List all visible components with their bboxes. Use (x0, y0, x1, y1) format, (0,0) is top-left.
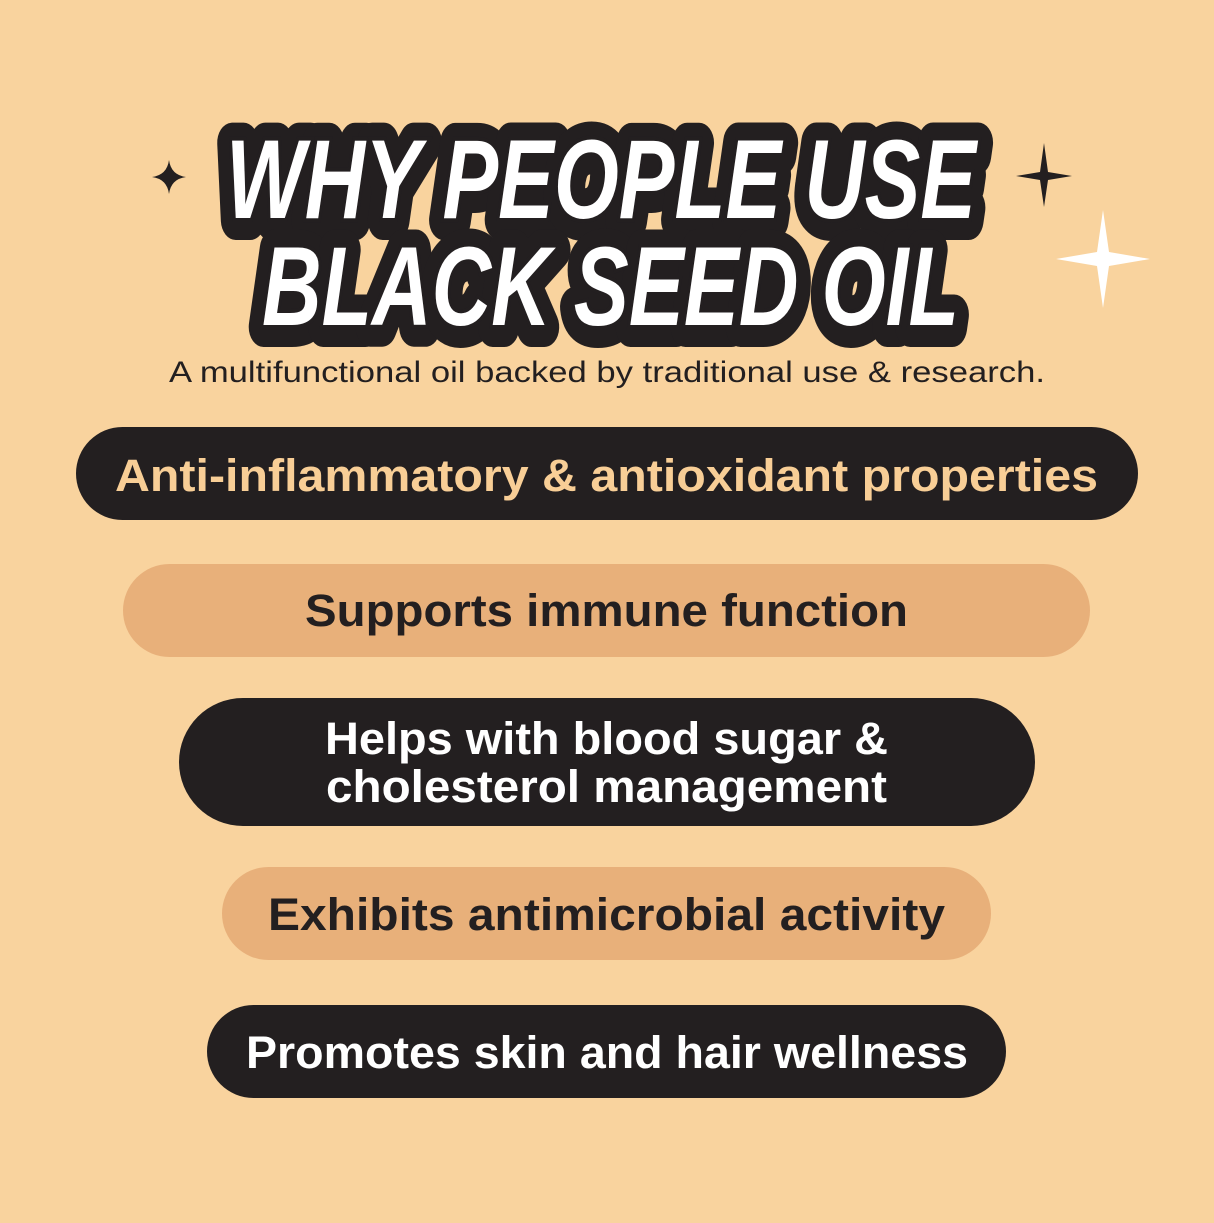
icon: sparkle right dark (1016, 143, 1072, 207)
title: BLACK SEED OIL (262, 226, 959, 351)
pill: antimicrobial (222, 867, 991, 960)
pill: immune (123, 564, 1090, 657)
subtitle: A multifunctional oil backed by traditional use & research. (169, 356, 1045, 389)
pill: blood sugar: Helps with blood sugar & (325, 713, 888, 764)
icon: sparkle right white (1056, 210, 1150, 308)
pill: anti-inflammatory (76, 427, 1138, 520)
pill: antimicrobial: Exhibits antimicrobial activity (268, 889, 945, 940)
title: BLACK SEED OIL (262, 224, 959, 349)
pill: blood sugar: cholesterol management (326, 761, 887, 812)
pill: blood sugar (179, 698, 1035, 826)
title: WHY PEOPLE USE (226, 119, 978, 244)
pill: skin and hair (207, 1005, 1006, 1098)
pill: skin and hair: Promotes skin and hair wellness (246, 1027, 968, 1078)
title (226, 117, 978, 351)
icon: sparkle left (152, 160, 186, 194)
pill: anti-inflammatory: Anti-inflammatory & antioxidant properties (115, 450, 1098, 501)
title: WHY PEOPLE USE (226, 117, 978, 242)
pill: immune: Supports immune function (305, 585, 908, 636)
